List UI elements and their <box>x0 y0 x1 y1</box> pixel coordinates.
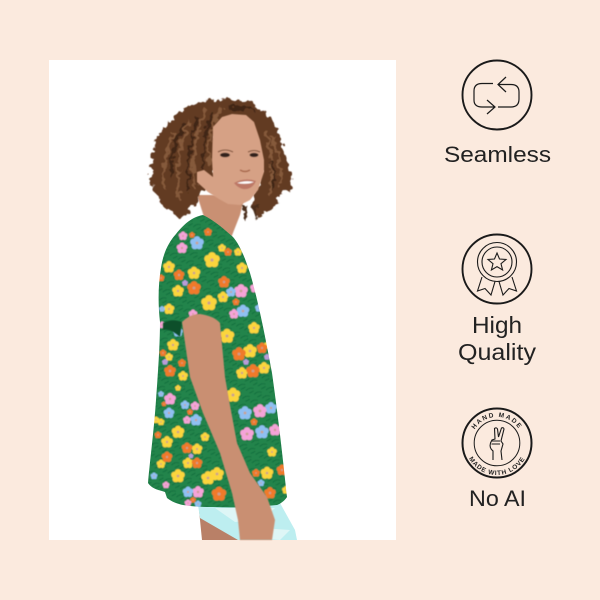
feature: Seamless <box>444 60 551 167</box>
icon: hand made stamp with peace hand <box>462 408 532 478</box>
white photo background <box>49 60 396 540</box>
icon: seamless loop arrows <box>462 60 532 130</box>
feature: No AI <box>462 408 532 511</box>
arm and hand <box>182 314 275 540</box>
label: No AI: No AI <box>469 486 526 511</box>
label: Seamless: Seamless <box>444 142 551 167</box>
sleeve shadow <box>163 320 182 337</box>
legs <box>199 510 238 540</box>
shorts tie-dye highlight <box>215 508 290 540</box>
neck <box>197 195 245 238</box>
icon: hand made stamp with peace hand: MADE WITH LOVE <box>469 456 525 475</box>
label: Quality: Quality <box>458 339 537 365</box>
floral t-shirt <box>148 215 287 508</box>
icon: award medal ribbon <box>462 234 532 304</box>
shorts <box>198 503 297 540</box>
label: High: High <box>472 312 522 338</box>
icon: hand made stamp with peace hand: HAND MADE <box>471 412 522 430</box>
hair <box>150 99 292 219</box>
feature: High Quality <box>458 234 537 365</box>
photo panel: child model wearing a floral t-shirt <box>49 60 396 540</box>
face <box>197 114 264 205</box>
